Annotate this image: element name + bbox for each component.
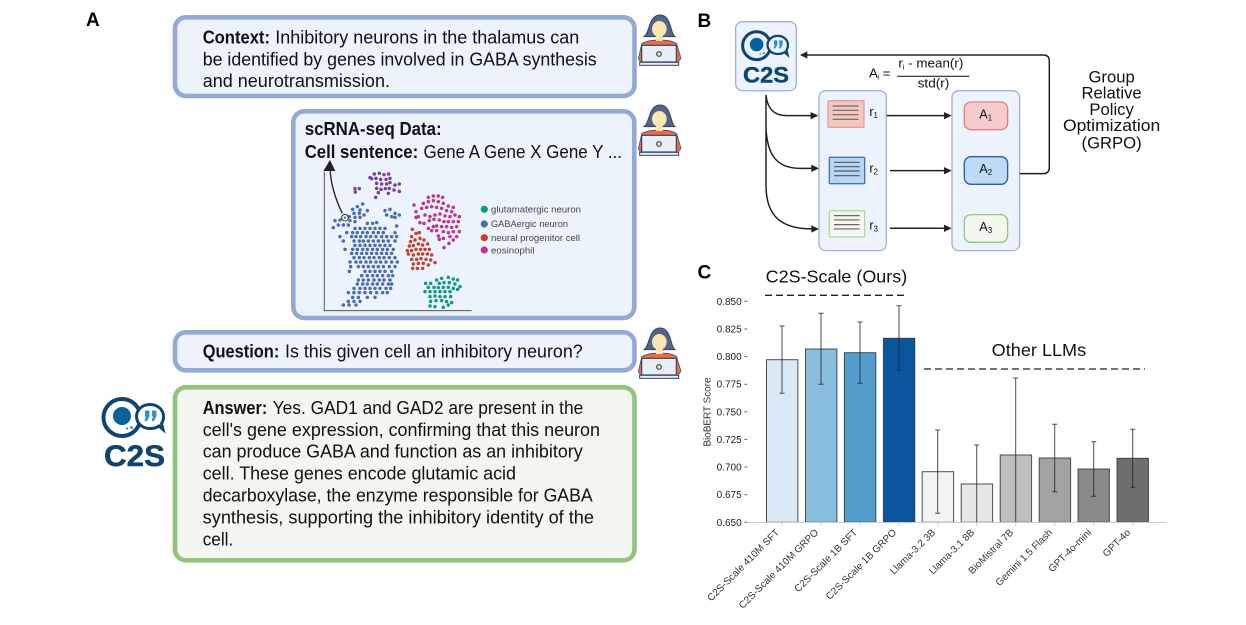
icon: C2S logo small <box>743 32 789 87</box>
panel A: answer bubble: Yes. GAD1 and GAD2 are present in the <box>273 398 583 418</box>
panel A: context bubble: Inhibitory neurons in the thalamus can <box>275 27 579 47</box>
formula: A <box>869 65 878 80</box>
GRPO label: (GRPO) <box>1082 133 1142 152</box>
scatter legend: neural progenitor cell <box>491 233 580 243</box>
response r2: r <box>869 162 874 176</box>
GRPO label: Optimization <box>1063 116 1160 135</box>
x axis labels: Llama-3.2 3B <box>888 527 938 577</box>
icon: C2S logo large: C2S <box>104 440 165 473</box>
y axis ticks and labels: 0.650 <box>717 518 742 529</box>
advantage A1: A <box>979 107 988 121</box>
cell sentence: Cell sentence: <box>305 142 418 162</box>
panel A: answer bubble: synthesis, supporting the inhibitory identity of the <box>203 508 594 528</box>
panel B: GRPO diagram <box>736 22 1160 251</box>
GRPO label: Relative <box>1082 84 1142 103</box>
response r1 <box>828 101 879 127</box>
y axis ticks and labels: 0.775 <box>717 380 742 391</box>
y axis ticks and labels: 0.725 <box>717 435 742 446</box>
formula: i <box>878 72 880 81</box>
advantage A3: A <box>979 220 988 234</box>
bars <box>766 338 1148 522</box>
scatter legend <box>481 204 581 255</box>
y axis ticks and labels: 0.675 <box>717 490 742 501</box>
group bracket: C2S-Scale <box>765 294 905 296</box>
advantage A2: A <box>979 162 988 176</box>
y axis ticks and labels <box>717 297 747 529</box>
advantages column <box>952 91 1020 251</box>
arrows: responses to advantages <box>887 112 952 232</box>
panel A: question bubble: Is this given cell an inhibitory neuron? <box>285 342 583 362</box>
scatter legend: GABAergic neuron <box>491 219 568 229</box>
response r1: 1 <box>874 111 879 120</box>
y axis ticks and labels: 0.750 <box>717 407 742 418</box>
response r3 <box>829 211 879 237</box>
formula: r <box>898 57 903 71</box>
advantage A2 <box>964 157 1008 184</box>
panel A: context bubble: and neurotransmission. <box>203 71 390 91</box>
x axis labels: C2S-Scale 1B SFT <box>793 527 860 595</box>
scatter plot <box>323 160 472 311</box>
panel A: context bubble: be identified by genes involved in GABA synthesis <box>203 49 597 69</box>
panel A: question bubble: Question: <box>203 342 279 362</box>
group heading: Other LLMs: Other LLMs <box>992 340 1086 360</box>
formula: i <box>903 63 905 72</box>
icon: user with laptop 2 <box>638 105 681 155</box>
panel label A: A <box>86 10 100 31</box>
GRPO label: Policy <box>1089 100 1135 119</box>
formula: - mean(r) <box>905 57 963 71</box>
icon: C2S logo large <box>104 399 165 473</box>
group bracket: Other LLMs <box>924 368 1145 370</box>
panel A: answer bubble: can produce GABA and function as an inhibitory <box>203 442 583 462</box>
y axis title: BioBERT Score <box>702 377 714 446</box>
advantage A1: 1 <box>988 113 993 122</box>
x axis labels: BioMistral 7B <box>967 527 1016 577</box>
formula: = <box>883 65 891 80</box>
y axis ticks and labels: 0.825 <box>717 324 742 336</box>
response r3: 3 <box>874 224 879 233</box>
y axis ticks and labels: 0.700 <box>717 462 742 474</box>
panel A: answer bubble: decarboxylase, the enzyme responsible for GABA <box>203 486 593 506</box>
arrow: GRPO feedback <box>800 51 1049 174</box>
response r1: r <box>869 105 874 119</box>
x axis labels <box>706 527 1133 611</box>
panel C: bar chart <box>702 267 1167 611</box>
panel A: context bubble <box>175 17 634 96</box>
panel A: answer bubble: cell. These genes encode glutamic acid <box>203 464 516 484</box>
C2S model box <box>736 22 796 91</box>
icon: user with laptop 3 <box>638 328 681 378</box>
response r3: r <box>869 218 874 232</box>
advantage A3: 3 <box>988 226 993 235</box>
advantage A2: 2 <box>988 168 993 177</box>
scatter legend: glutamatergic neuron <box>491 204 581 214</box>
x axis labels: Llama-3.1 8B <box>927 527 977 577</box>
x axis labels: C2S-Scale 1B GRPO <box>824 527 899 602</box>
x axis labels: C2S-Scale 410M SFT <box>706 527 782 604</box>
panel A: scRNA-seq data bubble <box>293 111 634 318</box>
panel A: answer bubble <box>175 387 634 560</box>
panel A: context bubble: Context: <box>203 27 270 47</box>
panel A: answer bubble: cell. <box>203 529 233 549</box>
group heading: C2S-Scale: C2S-Scale (Ours) <box>766 267 907 287</box>
formula: std(r) <box>918 76 949 90</box>
scatter legend: eosinophil <box>491 245 534 255</box>
response r2 <box>829 157 879 184</box>
error bars <box>780 306 1135 522</box>
scRNA heading: scRNA-seq Data: <box>305 119 442 139</box>
x axis labels: Gemini 1.5 Flash <box>994 527 1055 589</box>
GRPO label: Group <box>1088 67 1135 86</box>
x axis labels: GPT-4o <box>1101 527 1133 559</box>
icon: user with laptop 1 <box>638 15 681 65</box>
panel A: question bubble <box>175 332 634 370</box>
panel label C: C <box>698 262 712 284</box>
x axis line and ticks <box>747 522 1167 526</box>
x axis labels: GPT-4o-mini <box>1047 527 1094 575</box>
panel A: answer bubble: cell's gene expression, confirming that this neuron <box>203 420 600 440</box>
formula <box>869 57 969 90</box>
responses column <box>819 91 886 251</box>
arrows: C2S to responses <box>766 95 819 233</box>
cell sentence <box>305 142 622 162</box>
y axis ticks and labels: 0.850 <box>717 297 742 308</box>
y axis ticks and labels: 0.800 <box>717 352 742 363</box>
panel A: answer bubble: Answer: <box>203 398 267 418</box>
cell sentence: Gene A Gene X Gene Y ... <box>424 142 622 162</box>
icon: C2S logo small: C2S <box>743 62 789 87</box>
advantage A3 <box>964 215 1008 242</box>
panel label B: B <box>698 11 711 32</box>
response r2: 2 <box>874 168 879 177</box>
x axis labels: C2S-Scale 410M GRPO <box>737 527 821 611</box>
GRPO label <box>1063 67 1160 152</box>
advantage A1 <box>964 102 1008 130</box>
